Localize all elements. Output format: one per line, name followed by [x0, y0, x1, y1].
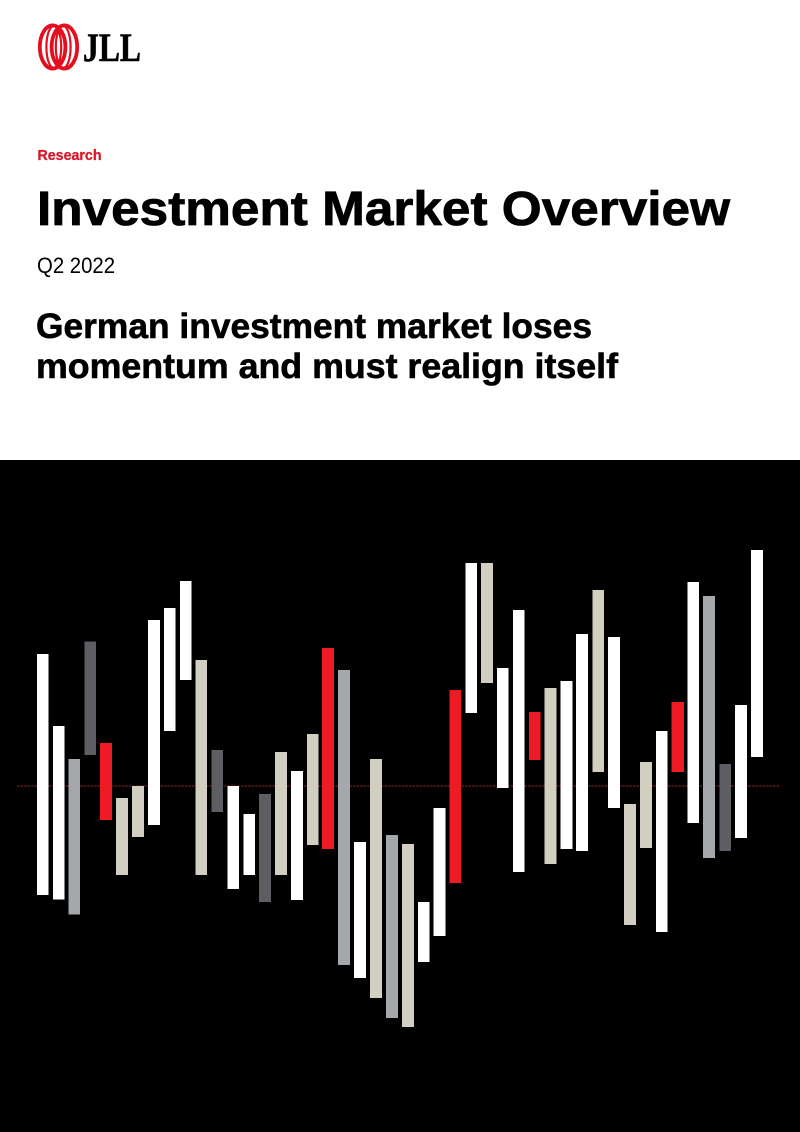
bar 4: [84, 642, 96, 755]
bar 6: [116, 798, 128, 875]
bar 36: [592, 590, 604, 772]
bar 16: [275, 752, 287, 875]
bar 3: [68, 759, 80, 914]
logo wordmark: JLL: [83, 25, 141, 70]
bar 7: [132, 786, 144, 837]
bar 35: [576, 634, 588, 851]
bar 10: [180, 581, 192, 680]
bar 1: [37, 654, 48, 895]
logo: JLL: [40, 25, 141, 70]
bar 2: [53, 726, 64, 900]
bar 40: [656, 731, 668, 932]
title: Investment Market Overview: [37, 183, 731, 236]
bar 12: [212, 750, 223, 812]
bar 9: [164, 608, 176, 731]
bar 5: [100, 743, 112, 820]
bar 43: [703, 596, 715, 858]
bar 34: [560, 681, 572, 849]
bar 27: [450, 690, 461, 883]
subtitle: [36, 307, 618, 386]
bar 23: [386, 835, 398, 1018]
bar 19: [322, 648, 334, 849]
bar 46: [751, 550, 763, 757]
bar 14: [244, 814, 255, 875]
bar 11: [196, 660, 207, 875]
subtitle line 2: momentum and must realign itself: [36, 347, 618, 386]
bar 38: [624, 804, 636, 925]
bar 18: [307, 734, 318, 845]
bar chart: floating bars: [37, 550, 763, 1027]
baseline: dashed red line: [17, 785, 780, 787]
subtitle line 1: German investment market loses: [36, 307, 592, 346]
bar 33: [544, 688, 556, 864]
bar 13: [228, 786, 239, 889]
bar 44: [720, 764, 731, 851]
bar 37: [608, 637, 620, 808]
icon: red interlaced ellipses: [40, 25, 77, 69]
section label: Research: Research: [38, 147, 102, 164]
bar 22: [370, 759, 382, 998]
bar 17: [291, 771, 303, 900]
bar 24: [402, 844, 414, 1027]
bar 30: [497, 668, 508, 788]
bar 26: [434, 808, 446, 936]
bar 39: [640, 762, 652, 848]
bar 21: [354, 842, 366, 978]
bar 42: [688, 582, 699, 823]
panel: black chart background with floating bars: [0, 460, 800, 1132]
bar 31: [513, 610, 524, 872]
bar 15: [259, 794, 271, 902]
bar 45: [735, 705, 747, 838]
date: Q2 2022: Q2 2022: [37, 253, 115, 278]
bar 41: [672, 702, 684, 772]
bar 29: [481, 563, 493, 683]
bar 32: [529, 712, 540, 760]
bar 20: [338, 670, 350, 965]
bar 8: [148, 620, 160, 825]
bar 25: [418, 902, 430, 962]
bar 28: [466, 563, 477, 713]
